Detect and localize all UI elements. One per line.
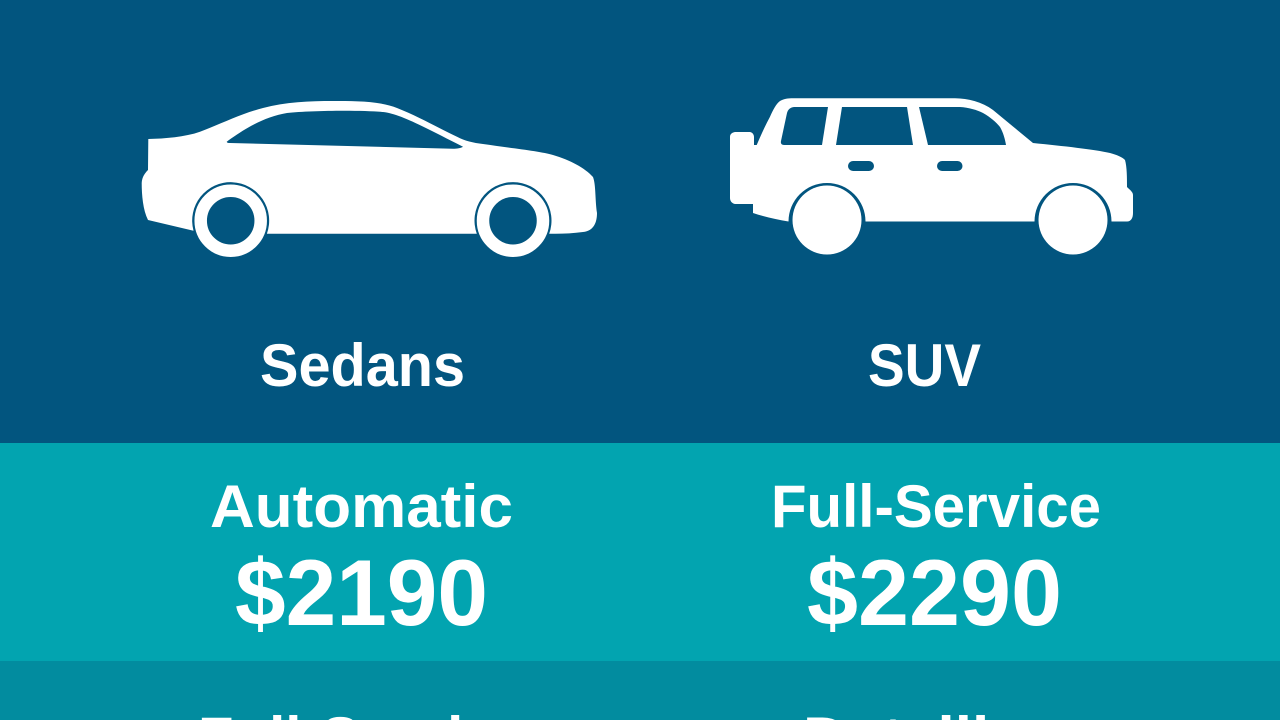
price: $2290: $2290 bbox=[807, 540, 1062, 645]
heading: SUV: SUV bbox=[868, 332, 981, 399]
label: Full-Service: Full-Service bbox=[771, 473, 1101, 540]
SUV front window bbox=[919, 107, 1006, 145]
door handle front bbox=[937, 161, 962, 171]
heading: Sedans: Sedans bbox=[260, 332, 465, 399]
SUV front wheel bbox=[1038, 186, 1108, 254]
icon: sedan car bbox=[142, 101, 597, 251]
panel: second price row bbox=[0, 661, 1280, 720]
SUV rear wheel bbox=[792, 186, 862, 254]
panel: vehicle types bbox=[0, 0, 1280, 443]
label: Automatic: Automatic bbox=[210, 473, 513, 540]
price: $2190: $2190 bbox=[235, 540, 488, 645]
panel: first price row bbox=[0, 443, 1280, 661]
icon: SUV bbox=[730, 98, 1133, 254]
rear wheel bbox=[201, 191, 261, 251]
SUV rear window bbox=[781, 107, 828, 145]
SUV middle window bbox=[836, 107, 913, 145]
front wheel bbox=[483, 191, 543, 251]
door handle rear bbox=[848, 161, 874, 171]
sedan window bbox=[227, 111, 463, 149]
